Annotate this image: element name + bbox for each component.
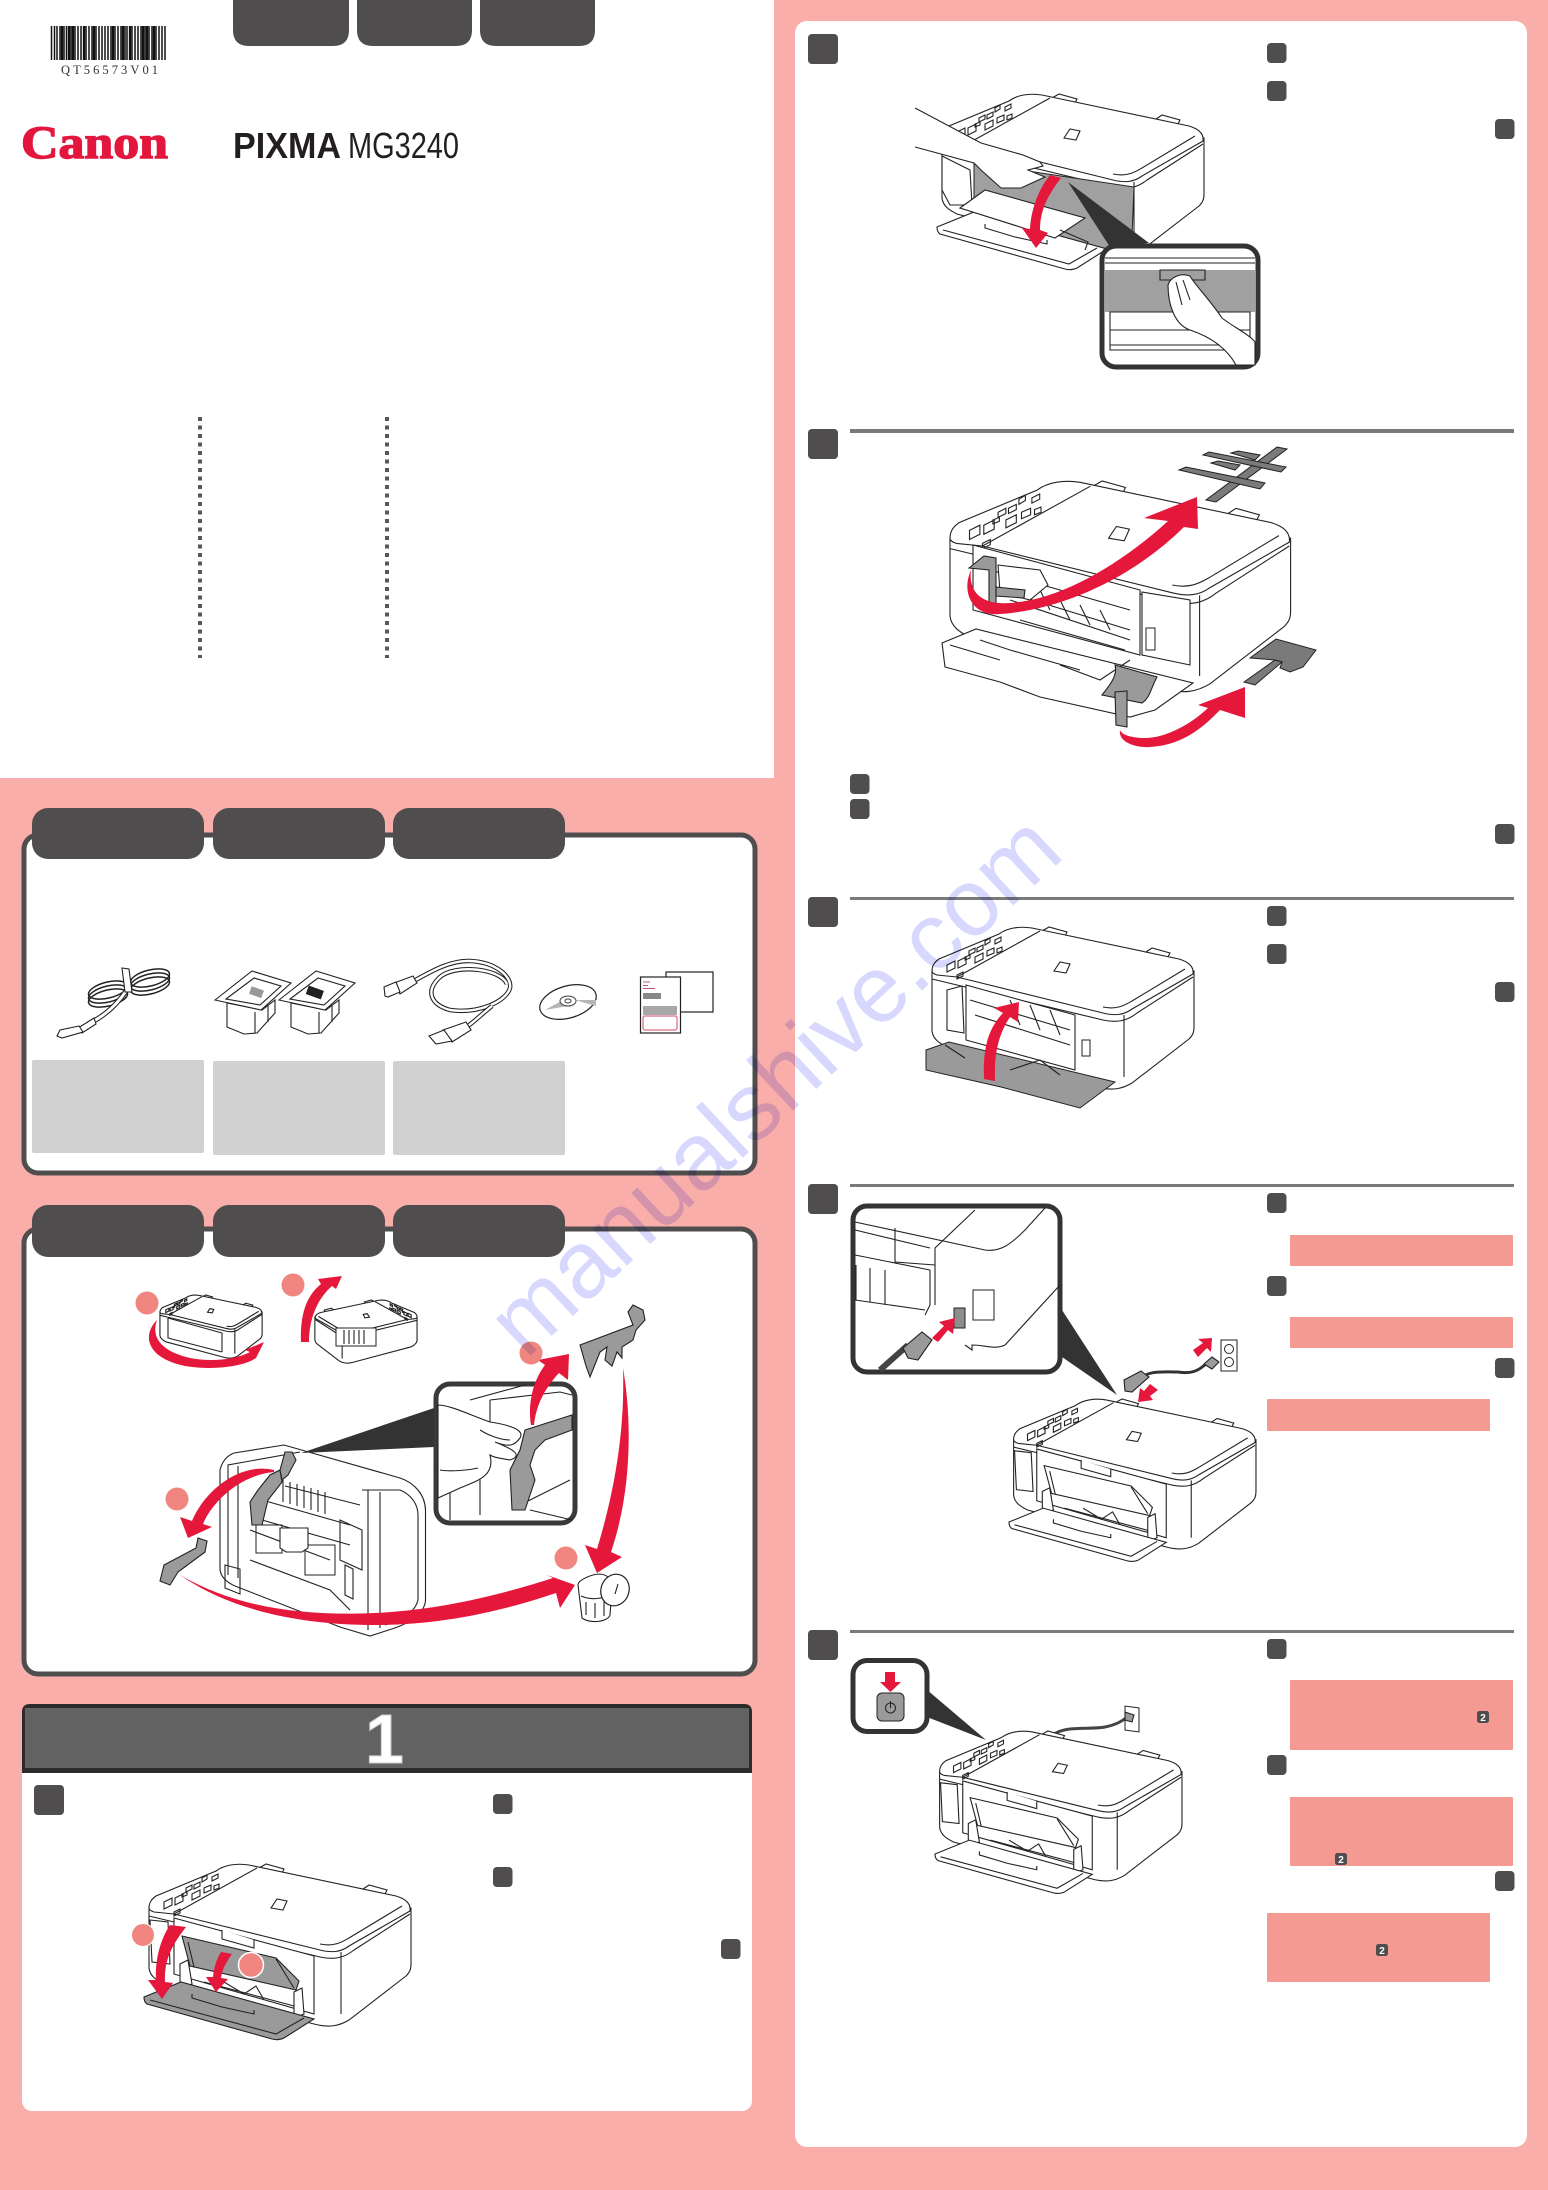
printer standing on rear, with tape [220, 1445, 426, 1636]
marker 2 [238, 1952, 264, 1978]
badge 2: 2 [1338, 1855, 1344, 1866]
power cord [1124, 1357, 1219, 1392]
removed tape strip [160, 1538, 207, 1585]
badge 2 [1477, 1711, 1489, 1724]
arrow: tilt [301, 1276, 342, 1342]
arrow: tape up [967, 497, 1198, 614]
zoom cone [1062, 1310, 1117, 1395]
instruction markers [1267, 43, 1514, 139]
top language tabs [233, 0, 595, 46]
watermark: manualshive.com [468, 794, 1081, 1375]
step square [808, 429, 838, 459]
arrow: open support [206, 1952, 232, 1992]
Canon logo: Canon [21, 117, 168, 169]
zoom cone [301, 1408, 434, 1453]
tape on carriage [969, 556, 1025, 603]
arrow: open tray [148, 1925, 186, 1999]
arrow: to outlet [1193, 1338, 1212, 1357]
instruction markers [850, 774, 1514, 844]
step square [808, 897, 838, 927]
instruction markers [493, 1794, 740, 1959]
arrow: part to bin [585, 1368, 629, 1573]
panel: step 1 [22, 1700, 752, 2111]
tape on tray [1102, 665, 1157, 727]
arrow: rotate [149, 1320, 264, 1368]
printer [935, 1731, 1182, 1893]
arrow: pull tape from inset [530, 1354, 569, 1425]
arrow: tape peeled from printer [180, 1469, 274, 1538]
step b [808, 34, 1514, 367]
product name: PIXMA [233, 125, 341, 166]
panel: remove protective material [24, 1205, 755, 1674]
step marker a [136, 1292, 158, 1314]
panel: right column steps [795, 21, 1527, 2147]
instruction markers [1267, 1639, 1514, 1891]
section rule 1 [850, 429, 1514, 433]
zoom cone [930, 1692, 986, 1740]
step marker c [520, 1342, 542, 1364]
panel: included items [24, 808, 755, 1173]
step square [808, 34, 838, 64]
step 1 banner [22, 1700, 752, 1778]
barcode [52, 26, 165, 77]
zoom cone [1068, 182, 1149, 247]
step marker d [166, 1488, 188, 1510]
badge 2 [1376, 1944, 1388, 1957]
hand [915, 108, 1045, 188]
grey tray [926, 1042, 1115, 1108]
power cord to wall [1053, 1706, 1139, 1735]
inset: hand on tab [1102, 246, 1258, 367]
instruction markers [1267, 906, 1514, 1002]
printer opening paper output cover [915, 94, 1204, 270]
badge 2 [1335, 1853, 1347, 1866]
step square [34, 1785, 64, 1815]
arrow: pull cover [1022, 175, 1061, 248]
banner number: 1 [365, 1700, 404, 1778]
printer front view with rotate arrow [136, 1292, 264, 1368]
step f: power on [808, 1630, 1514, 1982]
step marker e [554, 1546, 578, 1570]
arrow: close [984, 1002, 1019, 1081]
badge 2: 2 [1379, 1946, 1385, 1957]
section rule 4 [850, 1630, 1514, 1633]
arrow: tape lower [1120, 687, 1245, 747]
arrow: press [880, 1672, 901, 1692]
removed tape pieces top [1179, 447, 1287, 502]
step square [808, 1630, 838, 1660]
printer with tray opening [132, 1864, 411, 2040]
section rule 3 [850, 1184, 1514, 1187]
marker 1 [132, 1924, 154, 1946]
inset: power button [853, 1660, 927, 1732]
power button [877, 1693, 904, 1721]
paper tray, closed position [942, 629, 1193, 717]
printer with cover tilted down [926, 927, 1194, 1108]
icon: print head cartridges [215, 971, 355, 1034]
cover panel [0, 0, 774, 778]
arrow: to printer [1138, 1384, 1158, 1402]
pink note boxes with page references [1267, 1680, 1513, 1982]
printer with support up [1009, 1399, 1256, 1561]
print head carriage [998, 565, 1048, 600]
tabs [32, 1205, 565, 1257]
icon: wall outlet [1221, 1340, 1237, 1371]
step e: connect power [808, 1184, 1514, 1561]
icon: power cord [57, 965, 171, 1038]
icon: bin [578, 1570, 634, 1622]
product name [233, 125, 459, 166]
inset: tape close-up [436, 1384, 575, 1523]
icon: setup CD [536, 979, 600, 1025]
barcode number: QT56573V01 [61, 63, 158, 77]
item tabs [32, 808, 565, 859]
product name: MG3240 [348, 125, 459, 166]
step c: remove tape [808, 429, 1514, 844]
inset: rear power socket [853, 1206, 1060, 1372]
removed tape pieces bottom [1244, 639, 1316, 685]
paper support [180, 1936, 304, 2018]
removed orange part [580, 1305, 645, 1377]
arrow: plug in [932, 1318, 955, 1342]
printer with open cover [942, 481, 1291, 717]
printer rear view with tilt arrow [282, 1274, 417, 1363]
dotted column dividers [200, 417, 387, 658]
grey note boxes [32, 1060, 565, 1155]
icon: USB cable [384, 961, 510, 1044]
badge 2: 2 [1480, 1713, 1486, 1724]
pink note boxes [1267, 1235, 1513, 1431]
icon: documents [640, 972, 713, 1033]
instruction markers [1267, 1193, 1514, 1378]
step marker b [282, 1274, 304, 1296]
arrow: tape to bin [180, 1575, 575, 1625]
step d: close cover [808, 897, 1514, 1108]
paper tray [144, 1982, 314, 2040]
section rule 2 [850, 897, 1514, 900]
step square [808, 1184, 838, 1214]
